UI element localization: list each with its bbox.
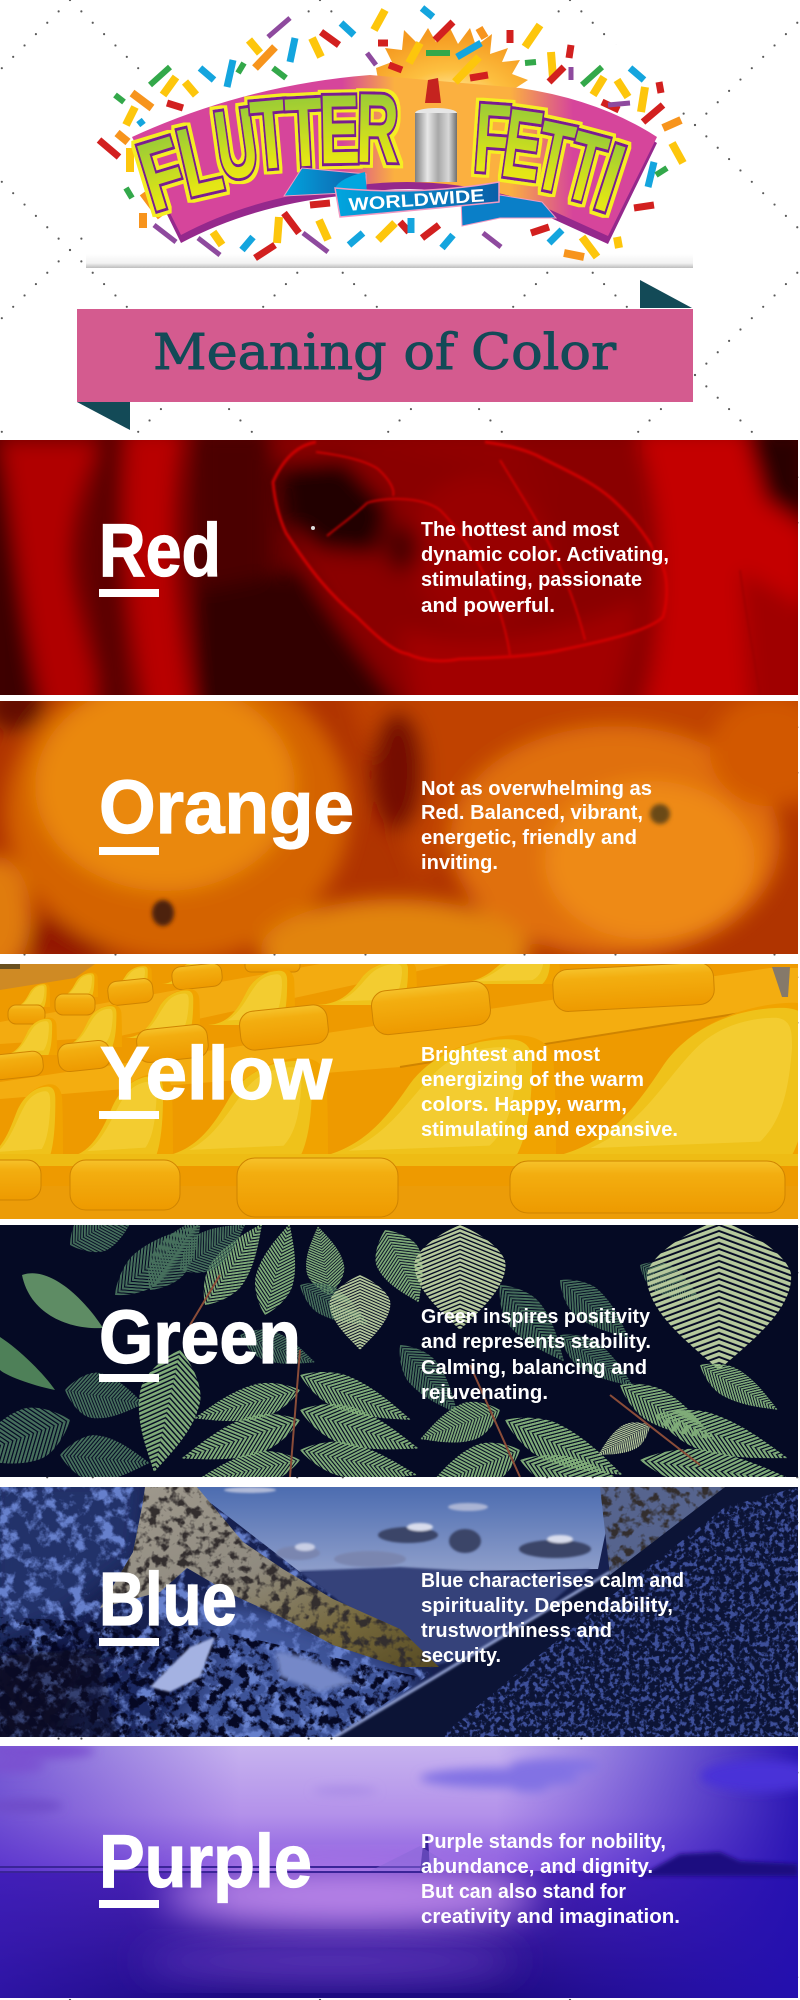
- underline: [99, 1900, 159, 1908]
- title banner: [77, 309, 693, 402]
- description: purple: abundance, and dignity.: [421, 1856, 653, 1878]
- blue ribbon: [284, 168, 556, 226]
- photo: ferns: [0, 1225, 798, 1477]
- heading: Green: Green: [99, 1295, 301, 1379]
- logo ground shadow: [86, 254, 693, 268]
- description: green: Calming, balancing and: [421, 1357, 647, 1379]
- word FETTI: T: [526, 99, 583, 214]
- word FLUTTER: T: [247, 79, 293, 191]
- ribbon fold bottom left: [77, 402, 130, 430]
- photo: bridge at dusk: [0, 1743, 800, 1998]
- description: green: rejuvenating.: [421, 1382, 548, 1404]
- underline: [99, 847, 159, 855]
- description: orange: Red. Balanced, vibrant,: [421, 802, 643, 824]
- description: blue: Blue characterises calm and: [421, 1570, 684, 1592]
- description: yellow: colors. Happy, warm,: [421, 1094, 627, 1116]
- description: yellow: [421, 1044, 678, 1141]
- description: orange: inviting.: [421, 852, 498, 874]
- photo: oranges: [0, 701, 798, 954]
- description: yellow: Brightest and most: [421, 1044, 600, 1066]
- photo: mountains: [0, 1477, 798, 1747]
- description: orange: [421, 778, 652, 874]
- description: green: and represents stability.: [421, 1331, 651, 1353]
- WORLDWIDE label: WORLDWIDE: [348, 185, 485, 215]
- word FLUTTER: L: [168, 102, 231, 218]
- panel: red: [0, 440, 798, 695]
- description: yellow: stimulating and expansive.: [421, 1119, 678, 1141]
- underline: [99, 1638, 159, 1646]
- silver canister and flare: [415, 78, 457, 182]
- description: red: The hottest and most: [421, 519, 619, 541]
- heading: Red: Red: [99, 508, 221, 592]
- description: purple: Purple stands for nobility,: [421, 1831, 666, 1853]
- logo: Flutter Fetti Worldwide: [86, 6, 693, 268]
- word FLUTTER: R: [355, 74, 400, 184]
- word FETTI: F: [471, 84, 514, 195]
- photo: stadium seats: [0, 953, 800, 1219]
- description: red: stimulating, passionate: [421, 569, 642, 591]
- description: purple: creativity and imagination.: [421, 1906, 680, 1928]
- sky: [190, 1487, 615, 1572]
- pink arch: [132, 75, 657, 244]
- description: red: [421, 519, 669, 617]
- panel: yellow: [0, 953, 800, 1219]
- underline: [99, 1374, 159, 1382]
- description: blue: spirituality. Dependability,: [421, 1595, 673, 1617]
- right slope: [335, 1487, 798, 1737]
- panel: blue: [0, 1477, 798, 1747]
- word FETTI: I: [584, 122, 637, 233]
- panel: green: [0, 1225, 798, 1477]
- white logo backing: [86, 6, 692, 258]
- description: yellow: energizing of the warm: [421, 1069, 644, 1091]
- word FLUTTER: U: [208, 86, 264, 200]
- description: purple: But can also stand for: [421, 1881, 626, 1903]
- snow and forest texture: [0, 1487, 440, 1737]
- underline: [99, 589, 159, 597]
- heading: Yellow: Yellow: [100, 1031, 333, 1115]
- word FETTI: [471, 84, 637, 233]
- rock peak: [100, 1487, 439, 1667]
- word FLUTTER: [127, 74, 400, 232]
- description: orange: Not as overwhelming as: [421, 778, 652, 800]
- title: Meaning of Color: [153, 323, 616, 381]
- description: blue: security.: [421, 1645, 501, 1667]
- ribbon fold top right: [640, 280, 692, 308]
- underline: [99, 1111, 159, 1119]
- heading: Orange: Orange: [99, 765, 354, 849]
- word FLUTTER: T: [283, 77, 326, 189]
- description: blue: [421, 1570, 684, 1667]
- word FLUTTER: F: [127, 115, 198, 232]
- description: green: [421, 1306, 651, 1404]
- photo: rose: [0, 440, 798, 695]
- description: blue: trustworthiness and: [421, 1620, 612, 1642]
- description: red: dynamic color. Activating,: [421, 544, 669, 566]
- heading: Blue: Blue: [99, 1557, 237, 1641]
- word FETTI: T: [555, 109, 617, 225]
- description: red: and powerful.: [421, 595, 555, 617]
- description: orange: energetic, friendly and: [421, 827, 637, 849]
- panel: orange: [0, 701, 798, 954]
- clouds: [224, 1487, 591, 1567]
- burst: [376, 24, 528, 125]
- description: purple: [421, 1831, 680, 1928]
- description: green: Green inspires positivity: [421, 1306, 651, 1328]
- word FETTI: E: [496, 87, 549, 201]
- heading: Purple: Purple: [99, 1819, 312, 1903]
- panel: purple: [0, 1743, 800, 1998]
- word FLUTTER: E: [318, 75, 361, 185]
- confetti: [99, 8, 683, 258]
- distant range: [298, 1567, 590, 1667]
